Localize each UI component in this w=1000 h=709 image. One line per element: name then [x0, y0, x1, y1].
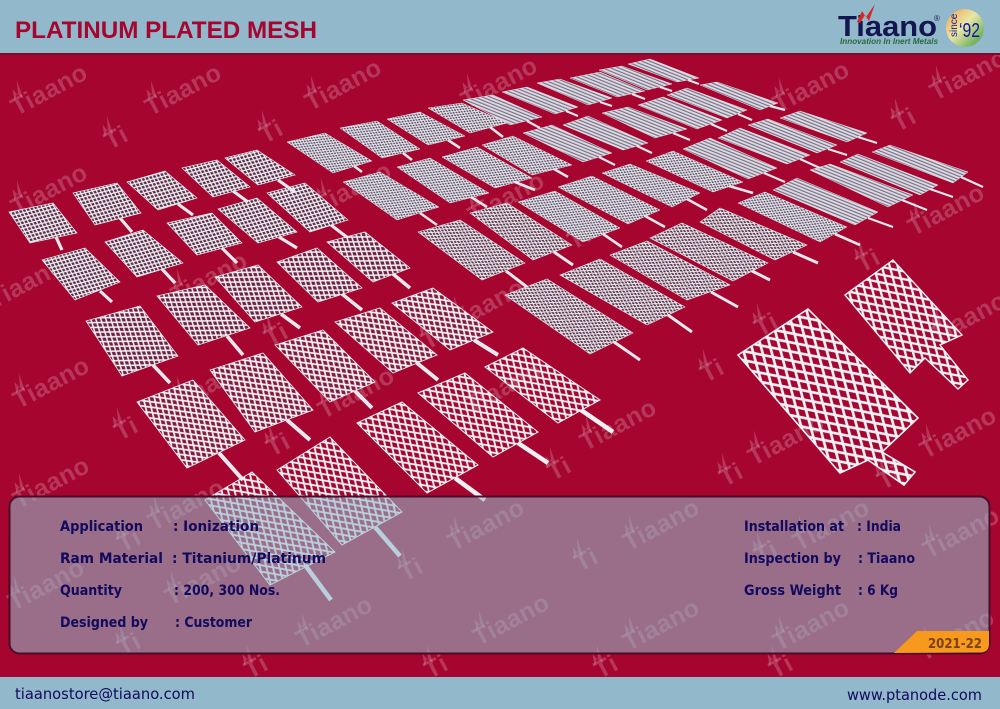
logo since 92 badge — [946, 9, 984, 47]
details: right column: Gross Weight — [744, 583, 841, 599]
watermarks: Tiaano — [788, 493, 874, 557]
watermarks: Ti — [563, 220, 596, 256]
watermarks: Tiaano — [6, 58, 92, 122]
watermarks: Tiaano — [143, 473, 229, 537]
watermarks: Ti — [113, 523, 146, 559]
watermarks: Tiaano — [575, 393, 661, 457]
mesh panels: left row 5 — [205, 348, 613, 600]
details: right column: Inspection by — [744, 551, 841, 567]
watermarks: Ti — [750, 307, 783, 343]
watermarks: Tiaano — [300, 53, 386, 117]
watermarks: Tiaano — [166, 246, 252, 310]
watermarks: Ti — [100, 120, 133, 156]
footer website: www.ptanode.com — [847, 686, 982, 704]
mesh panels: left rows 1 and 2 — [9, 150, 348, 302]
watermarks: Tiaano — [310, 156, 396, 220]
details: left column: : Ionization — [173, 519, 259, 535]
watermarks: Ti — [590, 649, 623, 685]
watermarks: Tiaano — [6, 158, 92, 222]
information panel — [10, 496, 990, 654]
details: left column: : 200, 300 Nos. — [174, 583, 280, 599]
watermarks: Tiaano — [618, 493, 704, 557]
watermarks: Tiaano — [456, 51, 542, 115]
details: left column: Quantity — [60, 583, 122, 599]
watermarks: Tiaano — [160, 548, 246, 612]
watermarks: Tiaano — [313, 361, 399, 425]
watermarks: Ti — [696, 353, 729, 389]
year tag — [894, 631, 989, 653]
watermarks: Ti — [113, 627, 146, 663]
logo since 92 badge: since — [949, 13, 960, 37]
details: left column — [60, 519, 326, 631]
watermarks: Tiaano — [140, 58, 226, 122]
details: left column: : Titanium/Platinum — [172, 551, 326, 567]
watermarks: Ti — [570, 542, 603, 578]
watermarks: Ti — [873, 460, 906, 496]
mesh panels: near middle rows — [418, 203, 818, 360]
watermarks: Tiaano — [166, 353, 252, 417]
watermarks: Ti — [888, 102, 921, 138]
mesh panel: large close-up left — [738, 309, 918, 485]
watermarks: Ti — [852, 243, 885, 279]
details: left column: Application — [60, 519, 143, 535]
watermarks: Tiaano — [3, 553, 89, 617]
logo tagline: Innovation In Inert Metals — [840, 36, 938, 46]
watermarks: Tiaano — [460, 356, 546, 420]
logo wordmark: Tiaano — [838, 11, 937, 43]
details: left column: : Customer — [175, 615, 253, 631]
watermarks: Tiaano — [8, 451, 94, 515]
watermarks: Ti — [765, 649, 798, 685]
watermarks: Tiaano — [8, 351, 94, 415]
mesh panels: left row 4 — [137, 288, 498, 480]
logo since 92 badge: ‘92 — [959, 20, 980, 42]
watermarks: Tiaano — [903, 178, 989, 242]
details: right column: : India — [857, 519, 901, 535]
watermarks: Tiaano — [468, 588, 554, 652]
header bar — [0, 0, 1000, 55]
watermarks: Tiaano — [443, 273, 529, 337]
watermarks: Ti — [750, 535, 783, 571]
footer bar — [0, 677, 1000, 709]
watermarks: Ti — [260, 317, 293, 353]
footer email: tiaanostore@tiaano.com — [15, 685, 195, 703]
logo registered mark: ® — [934, 14, 940, 23]
watermarks: Ti — [420, 649, 453, 685]
watermarks: Tiaano — [618, 593, 704, 657]
details: left column: Ram Material — [60, 551, 163, 567]
watermarks: Tiaano — [291, 590, 377, 654]
title: PLATINUM PLATED MESH — [15, 17, 317, 44]
details: right column: : Tiaano — [858, 551, 915, 567]
watermarks: Ti — [417, 320, 450, 356]
icon: logo lightning bolt — [857, 4, 875, 23]
watermarks: Ti — [715, 457, 748, 493]
details: right column — [744, 519, 915, 599]
mesh panel: large close-up right — [845, 260, 968, 389]
watermarks: Ti — [395, 552, 428, 588]
watermarks: Tiaano — [768, 55, 854, 119]
watermarks: Ti — [255, 114, 288, 150]
watermarks: Tiaano — [463, 166, 549, 230]
details: left column: Designed by — [60, 615, 148, 631]
year tag: 2021-22 — [928, 637, 982, 652]
watermarks: Ti — [110, 411, 143, 447]
watermarks: Ti — [262, 427, 295, 463]
watermarks: Ti — [240, 649, 273, 685]
watermarks: Tiaano — [443, 493, 529, 557]
details: right column: Installation at — [744, 519, 844, 535]
watermarks: Tiaano — [743, 408, 829, 472]
mesh panels: left row 3 — [86, 232, 410, 383]
watermarks: Tiaano — [913, 603, 999, 667]
watermarks: Tiaano — [768, 593, 854, 657]
mesh panels: far rows at top right — [463, 59, 983, 227]
watermarks: Ti — [543, 451, 576, 487]
mesh panels: middle rows — [287, 103, 860, 247]
details: right column: : 6 Kg — [858, 583, 898, 599]
watermarks: Tiaano — [915, 401, 1000, 465]
